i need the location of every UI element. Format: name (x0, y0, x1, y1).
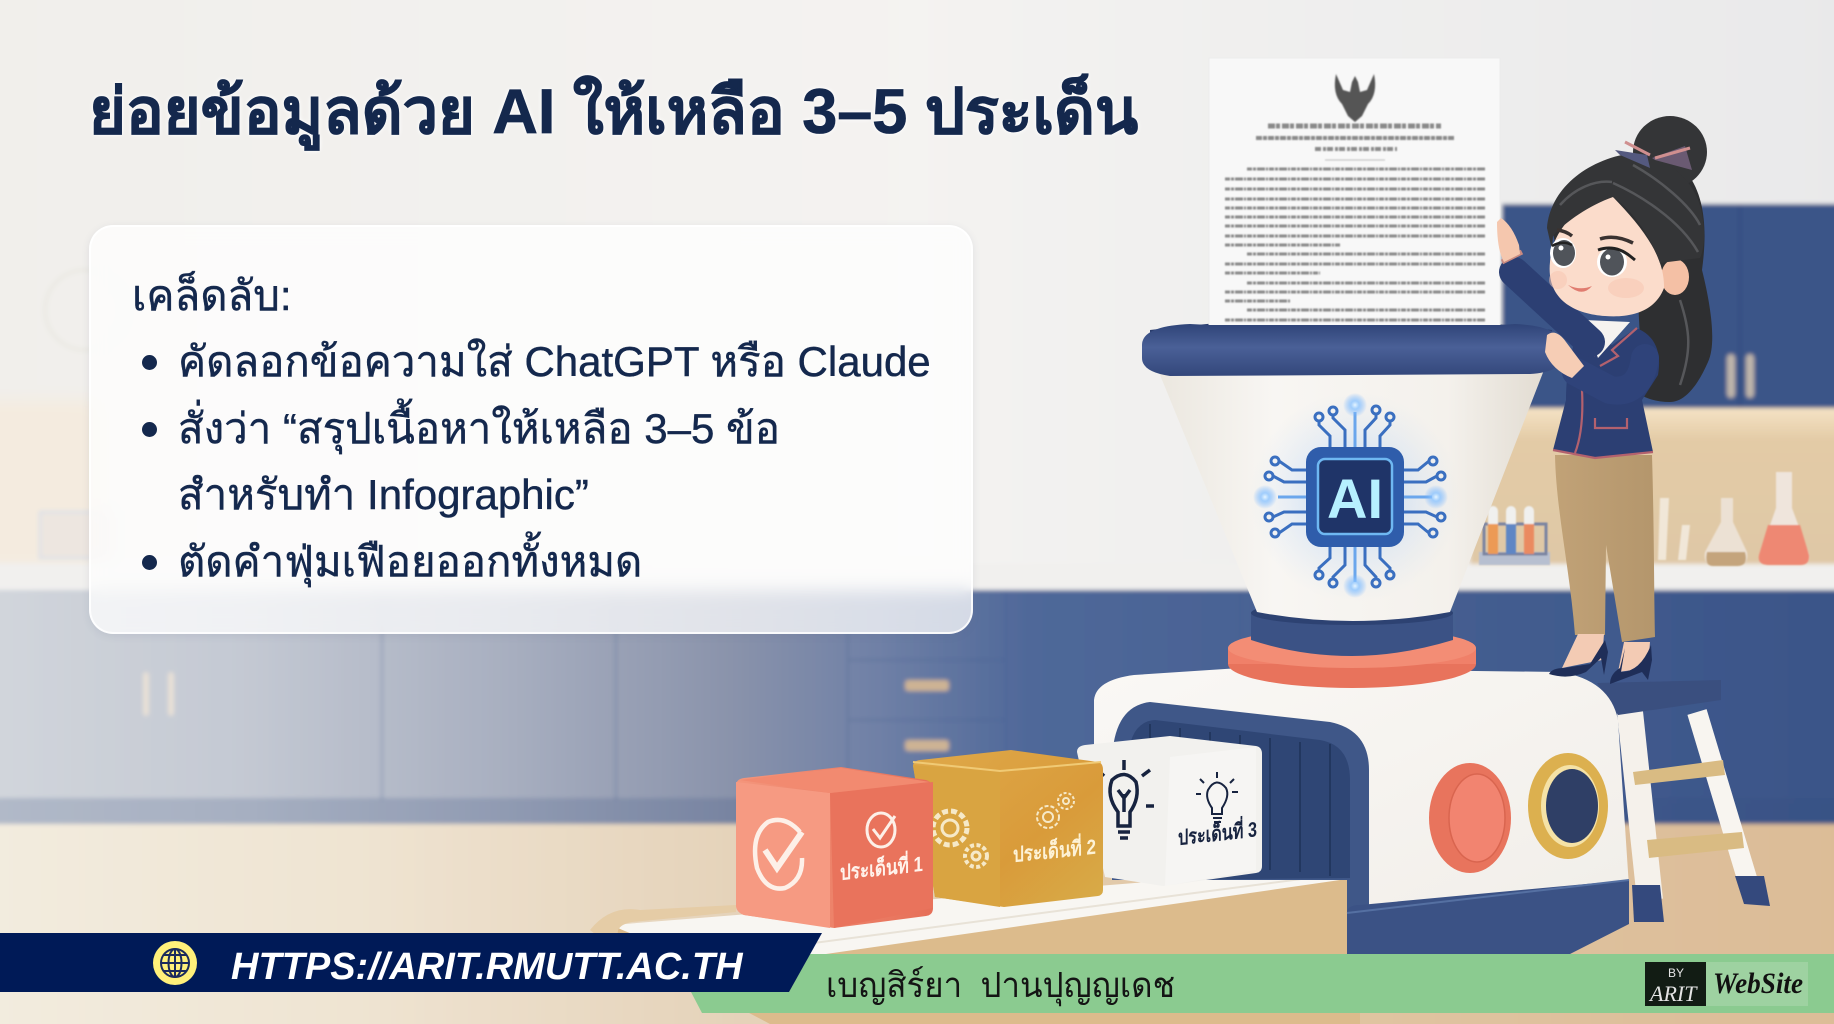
icon: garuda emblem (1335, 74, 1375, 122)
face (1550, 197, 1664, 316)
nose and smile (1568, 285, 1592, 292)
raised hand (1497, 218, 1520, 262)
cube 2: gold with gears (913, 750, 1103, 907)
funnel rim back (1150, 318, 1552, 345)
eyes and brows (1550, 230, 1635, 277)
title: ย่อยข้อมูลด้วย AI ให้เหลือ 3–5 ประเด็น (89, 77, 1138, 147)
character: woman in navy blazer (1497, 116, 1712, 684)
cube 2: gold with gears: ประเด็นที่ 2 (1013, 831, 1096, 867)
front arm (1576, 358, 1645, 391)
blazer trim (1553, 328, 1653, 458)
ankles (1562, 634, 1650, 672)
bow (1615, 142, 1692, 170)
shoes (1549, 640, 1652, 684)
tip bullet 2: สั่งว่า “สรุปเนื้อหาให้เหลือ 3–5 ข้อ (178, 405, 780, 452)
tip bullet 2: สำหรับทำ Infographic” (178, 471, 589, 518)
lab glassware on the counter (1479, 472, 1809, 566)
cube 3: white with bulb (1077, 736, 1262, 886)
green author bar (691, 954, 1834, 1013)
raised cuff (1502, 252, 1522, 262)
cube 1: coral with check: ประเด็นที่ 1 (840, 848, 923, 885)
paper document with government notice (1209, 58, 1500, 326)
tip bullet 3: ตัดคำฟุ่มเฟือยออกทั้งหมด (178, 538, 642, 585)
icon: gears right face (1037, 793, 1074, 828)
navy url bar (0, 933, 822, 992)
cube 3: white with bulb: ประเด็นที่ 3 (1178, 813, 1257, 850)
logo: ARIT Website: BY (1668, 966, 1684, 980)
funnel cone (1158, 370, 1544, 621)
blouse collar (1584, 320, 1630, 358)
funnel stand collar (1228, 601, 1476, 688)
navy url bar: HTTPS://ARIT.RMUTT.AC.TH (231, 946, 744, 988)
front hand (1545, 333, 1584, 378)
raised arm (1514, 272, 1590, 342)
AI chip icon with circuit traces (1250, 392, 1460, 602)
icon: light bulb right face (1196, 772, 1238, 822)
control buttons (1429, 753, 1608, 873)
panel: tips (89, 225, 973, 634)
tip bullet 1: คัดลอกข้อความใส่ ChatGPT หรือ Claude (178, 338, 931, 385)
icon: check circle right face (867, 813, 895, 847)
tips heading: เคล็ดลับ: (132, 272, 292, 319)
long hair (1552, 162, 1712, 402)
hair strands (1560, 165, 1700, 385)
pants (1555, 455, 1655, 642)
logo: ARIT Website (1645, 962, 1808, 1006)
icon: check circle left face (755, 820, 802, 889)
tip bullet 2 (142, 398, 780, 518)
hair bun (1633, 116, 1707, 188)
logo: ARIT Website: WebSite (1713, 967, 1803, 1000)
fringe (1547, 153, 1704, 263)
conveyor belt (590, 866, 1360, 1024)
logo: ARIT Website: ARIT (1648, 981, 1698, 1006)
blazer (1553, 328, 1659, 458)
circuit traces (1265, 406, 1445, 587)
icon: globe (153, 941, 197, 985)
AI chip icon with circuit traces: AI (1327, 467, 1383, 530)
icon: light bulb left face (1098, 760, 1154, 838)
machine body with funnel base (1094, 668, 1629, 954)
step ladder (1597, 680, 1770, 922)
funnel rim (1142, 324, 1561, 376)
cube 1: coral with check (736, 767, 933, 928)
ear (1661, 259, 1689, 295)
green author bar: เบญสิร์ยา ปานปุญญเดช (826, 966, 1175, 1006)
icon: gears left face (933, 811, 987, 867)
